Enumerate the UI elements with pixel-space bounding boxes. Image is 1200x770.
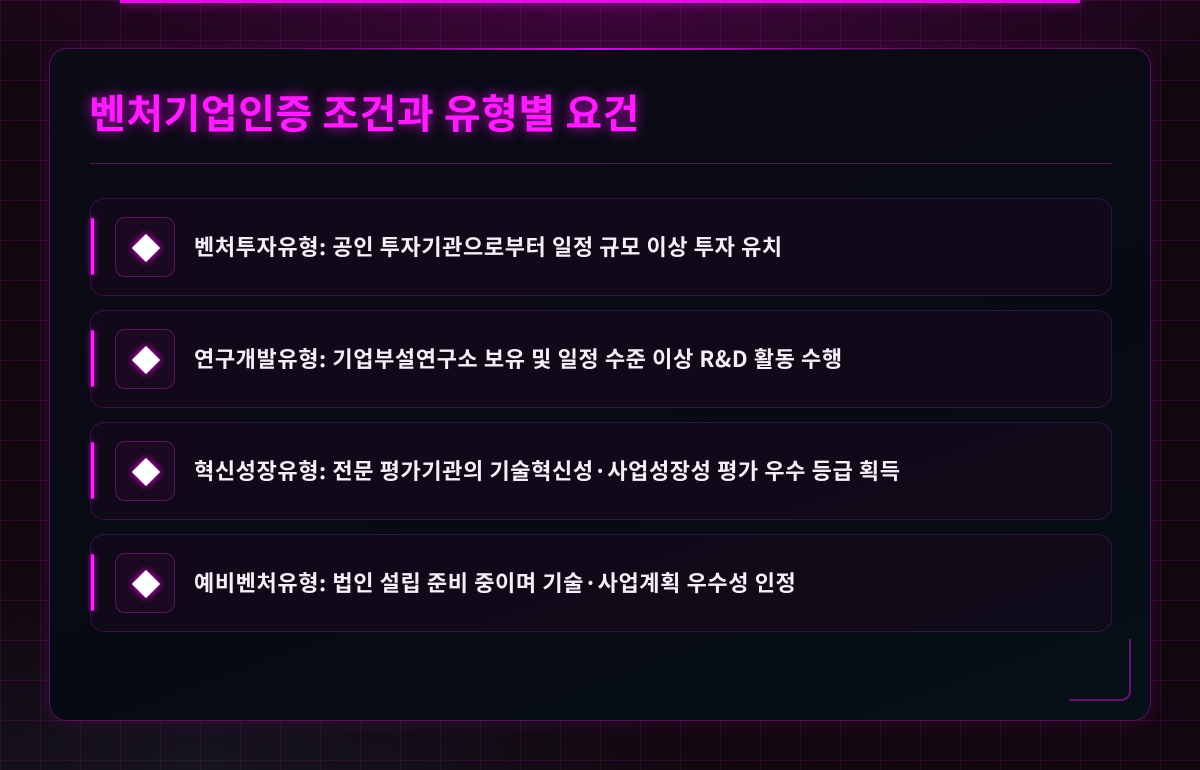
icon: diamond bbox=[115, 217, 175, 277]
text: 벤처투자유형: 공인 투자기관으로부터 일정 규모 이상 투자 유치 bbox=[194, 230, 783, 262]
item: venture investment bbox=[90, 198, 1112, 296]
icon: diamond bbox=[115, 441, 175, 501]
icon: diamond bbox=[115, 329, 175, 389]
item: R&D bbox=[90, 310, 1112, 408]
item: pre-venture bbox=[90, 534, 1112, 632]
text: 예비벤처유형: 법인 설립 준비 중이며 기술·사업계획 우수성 인정 bbox=[194, 566, 796, 598]
icon: diamond bbox=[115, 553, 175, 613]
text: 연구개발유형: 기업부설연구소 보유 및 일정 수준 이상 R&D 활동 수행 bbox=[194, 342, 843, 374]
item: innovation growth bbox=[90, 422, 1112, 520]
text: 혁신성장유형: 전문 평가기관의 기술혁신성·사업성장성 평가 우수 등급 획득 bbox=[194, 454, 901, 486]
title: 벤처기업인증 조건과 유형별 요건 bbox=[89, 82, 640, 140]
